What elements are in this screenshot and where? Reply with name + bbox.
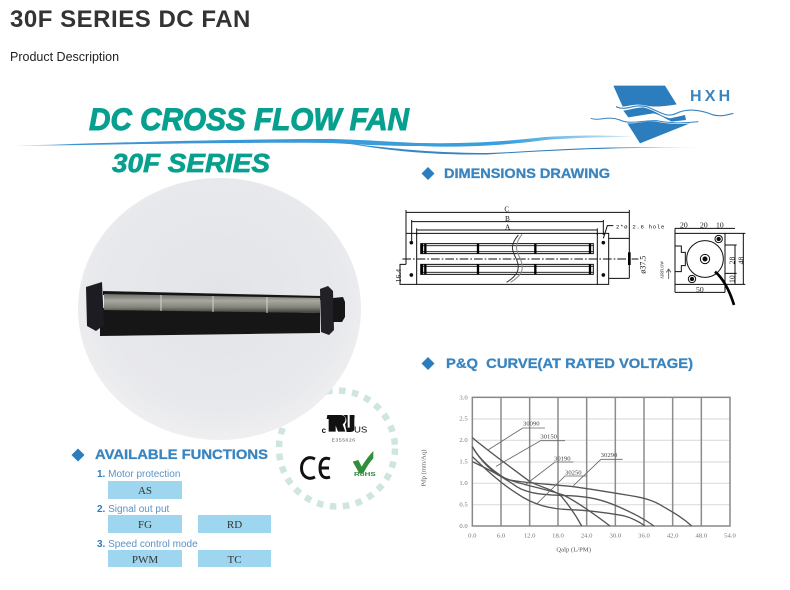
x axis labels: 6.0 <box>497 532 506 539</box>
icon: CE mark <box>302 458 330 478</box>
icon: UL certification: c <box>322 426 327 435</box>
heading: DC cross flow fan: DC CROSS FLOW FAN <box>89 101 410 137</box>
side view: 10 <box>728 275 737 283</box>
side view: 50 <box>696 285 704 294</box>
curve labels: 30150 <box>540 433 558 440</box>
front view: ø37.5 <box>639 256 648 274</box>
product photo circle <box>78 178 361 440</box>
side view: 48 <box>736 257 745 264</box>
y axis labels: 3.0 <box>459 394 468 401</box>
x axis title: Qalp (L/PM) <box>556 547 591 554</box>
box: RD <box>198 515 271 533</box>
x axis labels: 42.0 <box>667 532 679 539</box>
y axis labels: 0.5 <box>459 502 468 509</box>
heading: 30F series: 30F SERIES <box>112 148 271 178</box>
y axis labels: 2.0 <box>459 437 468 444</box>
leader lines <box>488 428 623 503</box>
performance curves <box>472 438 692 526</box>
box: RD: RD <box>227 519 242 531</box>
logo text: HXH <box>690 88 733 105</box>
icon: UL certification <box>322 414 368 444</box>
icon: diamond bullet <box>422 357 434 370</box>
P&Q line chart <box>420 394 736 554</box>
functions heading: AVAILABLE FUNCTIONS <box>95 446 268 462</box>
dimension labels: C <box>504 205 509 214</box>
section heading: P&Q curve: P&Q CURVE(AT RATED VOLTAGE) <box>446 355 693 371</box>
item 2 label: 2. Signal out put <box>97 504 170 515</box>
fan photo <box>86 282 345 336</box>
front view <box>394 205 665 284</box>
side view: AIRFLOW <box>659 261 664 279</box>
x axis labels: 30.0 <box>610 532 622 539</box>
title: 30F SERIES DC FAN <box>10 6 251 33</box>
x axis labels: 0.0 <box>468 532 477 539</box>
x axis labels: 54.0 <box>724 532 736 539</box>
item 1 label: 1. Motor protection <box>97 469 180 480</box>
box: PWM <box>108 550 182 567</box>
y axis labels: 1.5 <box>459 459 468 466</box>
front view: 16.4 <box>394 269 403 282</box>
x axis labels: 48.0 <box>696 532 708 539</box>
y axis labels <box>459 394 468 530</box>
icon: diamond bullet <box>72 448 84 462</box>
x axis labels: 24.0 <box>581 532 593 539</box>
side view: 10 <box>716 220 724 229</box>
y axis labels: 1.0 <box>459 480 468 487</box>
side view labels: 20 <box>680 220 688 229</box>
front view: 2*ø 2.6 hole <box>616 224 665 231</box>
icon: UL certification: E355626 <box>332 438 355 444</box>
panel: available functions <box>72 446 271 567</box>
x axis labels: 36.0 <box>638 532 650 539</box>
banner swoosh <box>12 136 698 155</box>
side view: 28 <box>728 257 737 264</box>
box: AS <box>108 481 182 499</box>
box: PWM: PWM <box>132 554 158 566</box>
box: FG: FG <box>138 519 152 531</box>
y axis labels: 0.0 <box>459 523 468 530</box>
curve labels: 30250 <box>565 469 582 476</box>
box: AS: AS <box>138 485 152 497</box>
curve labels: 30290 <box>601 452 618 459</box>
x axis labels <box>468 532 736 539</box>
icon: RoHS check: RoHS <box>354 472 376 478</box>
icon: diamond bullet <box>422 167 434 180</box>
front view: B <box>505 214 510 223</box>
icon: UL certification: ® <box>352 414 356 419</box>
icon: UL certification: US <box>354 425 368 435</box>
curve labels: 30090 <box>523 421 540 428</box>
subtitle: product description: Product Description <box>10 50 119 64</box>
logo: HXH <box>591 86 733 143</box>
curve labels: 30190 <box>554 455 571 462</box>
certification dotted ring <box>279 390 395 506</box>
box: FG <box>108 515 182 533</box>
dimensions drawing <box>394 205 745 305</box>
x axis labels: 18.0 <box>552 532 564 539</box>
curve labels <box>523 421 618 476</box>
side view <box>659 220 745 305</box>
box: TC: TC <box>227 554 242 566</box>
side view: 20 <box>700 220 708 229</box>
front view: A <box>505 222 511 231</box>
icon: RoHS check <box>353 451 376 478</box>
y axis title: Pdp (mm/Aq) <box>420 450 427 486</box>
x axis labels: 12.0 <box>524 532 536 539</box>
y axis labels: 2.5 <box>459 416 468 423</box>
item 3 label: 3. Speed control mode <box>97 539 198 550</box>
section heading: dimensions drawing: DIMENSIONS DRAWING <box>444 165 610 181</box>
box: TC <box>198 550 271 567</box>
